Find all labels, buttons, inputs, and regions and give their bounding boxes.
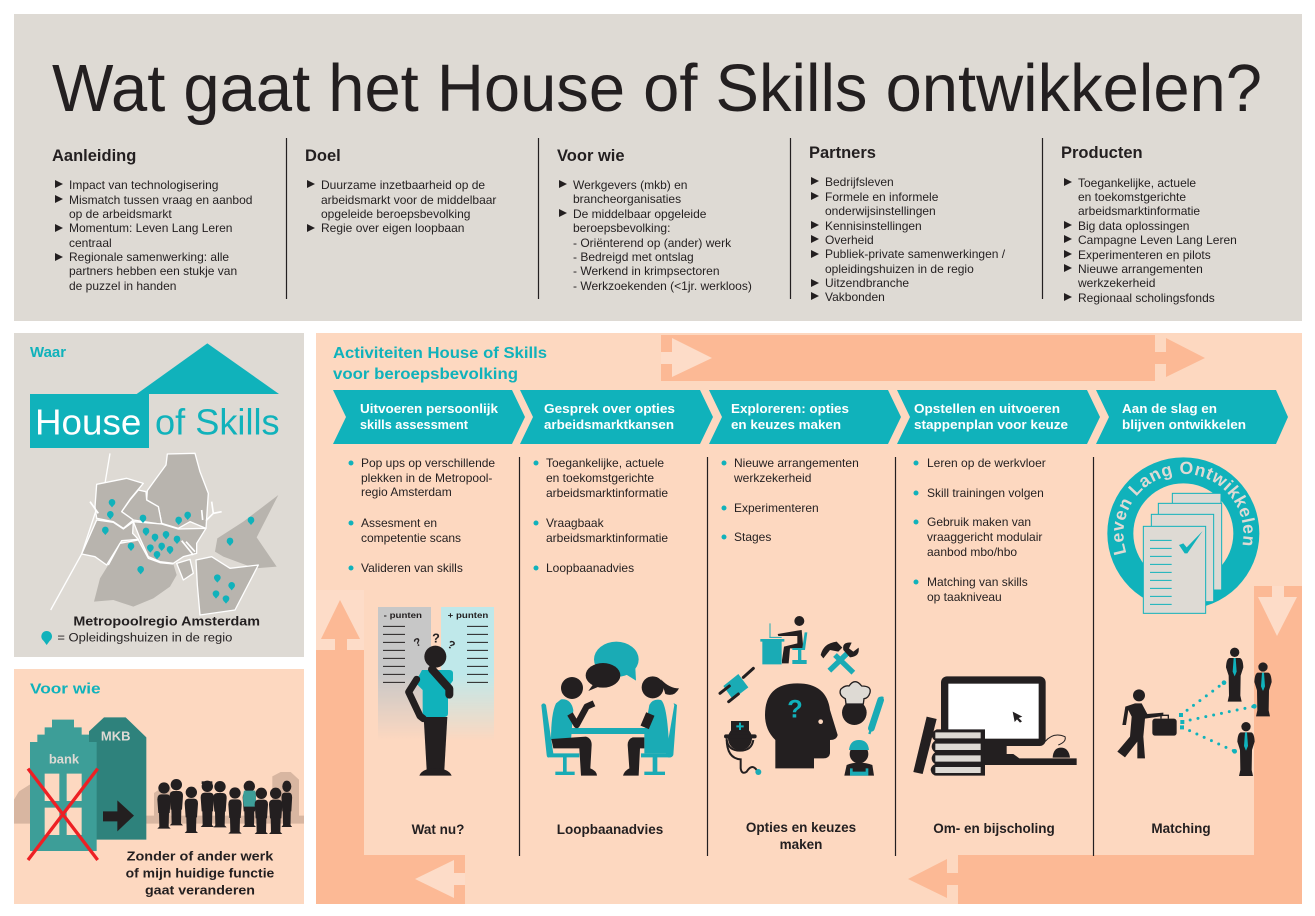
step 4: Opstellen en uitvoeren	[914, 401, 1060, 416]
logo: House of Skills: of Skills	[155, 402, 280, 443]
column: Voor wie: - Bedreigd met ontslag	[573, 250, 694, 264]
caption: of mijn huidige functie	[126, 865, 274, 880]
icon: computer and books	[913, 676, 1077, 776]
heading: Waar: Waar	[30, 344, 66, 361]
icon: crowd of people	[157, 779, 292, 834]
list: column 1: regio Amsterdam	[361, 485, 452, 499]
column: Aanleiding	[52, 147, 252, 293]
list: column 4: Gebruik maken van	[927, 515, 1031, 529]
column: Producten: Regionaal scholingsfonds	[1078, 291, 1215, 305]
column: Aanleiding: Mismatch tussen vraag en aanbod	[69, 193, 252, 207]
legend: = Opleidingshuizen in de regio	[57, 631, 232, 645]
icon: job seeker matched to jobs	[1117, 648, 1272, 776]
column: Partners: Kennisinstellingen	[825, 219, 922, 233]
column: Doel: opgeleide beroepsbevolking	[321, 207, 470, 221]
heading: Voor wie: Voor wie	[30, 680, 101, 697]
step 1: Uitvoeren persoonlijk	[360, 401, 499, 416]
step 5: Aan de slag en	[1122, 401, 1217, 416]
list: column 4: Matching van skills	[927, 575, 1028, 589]
logo: House of Skills	[30, 343, 280, 448]
column: Producten: Campagne Leven Lang Leren	[1078, 233, 1237, 247]
column: Partners: Publiek-private samenwerkingen /	[825, 247, 1006, 261]
list: column 4: Leren op de werkvloer	[927, 456, 1046, 470]
column: Partners	[809, 144, 1006, 304]
column: Producten: Experimenteren en pilots	[1078, 248, 1211, 262]
icon: head with career options	[720, 616, 883, 776]
caption: Zonder of ander werk	[127, 849, 274, 864]
step 1: skills assessment	[360, 417, 469, 432]
caption: Matching: Matching	[1151, 821, 1211, 836]
column: Aanleiding: Aanleiding	[52, 147, 136, 165]
list: column 4: vraaggericht modulair	[927, 530, 1042, 544]
panel: Waar	[14, 333, 304, 657]
icon: Leven Lang Ontwikkelen badge	[1107, 457, 1260, 614]
heading: Activiteiten: Activiteiten House of Skills	[333, 345, 547, 362]
column: Producten	[1061, 144, 1237, 305]
column: Partners: Vakbonden	[825, 290, 885, 304]
column: Producten: en toekomstgerichte	[1078, 190, 1186, 204]
column: Aanleiding: Regionale samenwerking: alle	[69, 250, 229, 264]
list: column 1: competentie scans	[361, 531, 461, 545]
list: column 2: en toekomstgerichte	[546, 471, 654, 485]
map title: Metropoolregio Amsterdam	[73, 613, 260, 628]
column: Voor wie: beroepsbevolking:	[573, 221, 670, 235]
column: Voor wie	[557, 147, 752, 293]
column: Voor wie: De middelbaar opgeleide	[573, 207, 707, 221]
column: Producten: Producten	[1061, 144, 1143, 162]
list: column 4: op taakniveau	[927, 590, 1002, 604]
list: column 1: Pop ups op verschillende	[361, 456, 495, 470]
column: Voor wie: - Oriënterend op (ander) werk	[573, 236, 732, 250]
list: column 2	[534, 456, 668, 575]
column: Doel: Doel	[305, 147, 341, 165]
column: Voor wie: Voor wie	[557, 147, 625, 165]
caption: gaat veranderen	[145, 883, 255, 898]
list: column 2: Vraagbaak	[546, 516, 605, 530]
list: column 3: Experimenteren	[734, 501, 819, 515]
column: Producten: werkzekerheid	[1077, 276, 1155, 290]
list: column 3: Stages	[734, 530, 771, 544]
panel: Voor wie	[14, 669, 304, 904]
step 4: stappenplan voor keuze	[914, 417, 1068, 432]
column: Aanleiding: centraal	[69, 236, 112, 250]
building: bank	[30, 720, 97, 851]
list: column 3: werkzekerheid	[733, 471, 811, 485]
icon: Leven Lang Ontwikkelen badge: Leven Lang Ontwikkelen	[1114, 462, 1255, 556]
logo: House of Skills: House	[35, 402, 141, 443]
title: Wat gaat het House of Skills ontwikkelen?	[52, 51, 1262, 126]
step 1	[333, 390, 525, 444]
caption: Opties en keuzes maken	[746, 820, 856, 852]
column: Doel: Regie over eigen loopbaan	[321, 221, 464, 235]
column: Partners: Uitzendbranche	[825, 276, 909, 290]
heading: Activiteiten: voor beroepsbevolking	[333, 366, 518, 383]
column: Voor wie: - Werkend in krimpsectoren	[573, 264, 720, 278]
column: Partners: Overheid	[825, 233, 874, 247]
column: Aanleiding: Impact van technologisering	[69, 178, 218, 192]
building: bank: bank	[49, 752, 80, 767]
column: Voor wie: - Werkzoekenden (<1jr. werkloos)	[573, 279, 752, 293]
icon: red cross	[28, 769, 98, 860]
list: column 2: Toegankelijke, actuele	[546, 456, 664, 470]
skyline	[14, 772, 304, 824]
icon: thinking person with lists	[378, 607, 494, 776]
step 5: blijven ontwikkelen	[1122, 417, 1246, 432]
list: column 3	[722, 456, 859, 544]
column: Partners: Formele en informele	[825, 190, 939, 204]
map: Metropoolregio Amsterdam	[51, 453, 278, 615]
column: Voor wie: Werkgevers (mkb) en	[573, 178, 687, 192]
column: Producten: arbeidsmarktinformatie	[1078, 204, 1200, 218]
arrow: circular flow	[316, 335, 1302, 904]
column: Partners: Bedrijfsleven	[825, 175, 894, 189]
column: Aanleiding: de puzzel in handen	[69, 279, 176, 293]
column: Partners: Partners	[809, 144, 876, 162]
caption: Wat nu?: Wat nu?	[412, 822, 464, 837]
list: column 2: arbeidsmarktinformatie	[546, 486, 668, 500]
list: column 3: Nieuwe arrangementen	[734, 456, 859, 470]
building: MKB: MKB	[101, 729, 130, 744]
column: Aanleiding: Momentum: Leven Lang Leren	[69, 221, 232, 235]
column: Doel: Duurzame inzetbaarheid op de	[321, 178, 485, 192]
icon: thinking person with lists: ?	[412, 636, 424, 650]
column: Aanleiding: partners hebben een stukje van	[69, 264, 237, 278]
list: column 4	[914, 456, 1046, 604]
icon: two people in conversation	[541, 642, 679, 776]
caption: Loopbaanadvies: Loopbaanadvies	[557, 822, 663, 837]
icon: thinking person with lists: - punten	[384, 611, 422, 620]
list: column 4: Skill trainingen volgen	[927, 486, 1044, 500]
list: column 2: Loopbaanadvies	[546, 561, 634, 575]
column: Producten: Nieuwe arrangementen	[1078, 262, 1203, 276]
column: Producten: Toegankelijke, actuele	[1078, 176, 1196, 190]
icon: head with career options: ?	[787, 695, 803, 723]
step 2: arbeidsmarktkansen	[544, 417, 674, 432]
caption: Opties en keuzes maken: maken	[780, 837, 822, 852]
panel: header	[14, 14, 1302, 321]
list: column 1	[348, 456, 495, 575]
step 2: Gesprek over opties	[544, 401, 675, 416]
list: column 1: Valideren van skills	[361, 561, 463, 575]
caption	[126, 849, 274, 898]
step 2	[520, 390, 713, 444]
heading: Activiteiten	[333, 345, 547, 383]
list: column 1: Assesment en	[361, 516, 437, 530]
column: Voor wie: brancheorganisaties	[573, 192, 681, 206]
column: Doel	[305, 147, 496, 235]
step 4	[897, 390, 1100, 444]
step 3: en keuzes maken	[731, 417, 841, 432]
list: column 4: aanbod mbo/hbo	[927, 545, 1017, 559]
icon: thinking person with lists: ?	[445, 639, 457, 653]
column: Doel: arbeidsmarkt voor de middelbaar	[321, 193, 496, 207]
list: column 1: plekken in de Metropool-	[361, 471, 492, 485]
step 3	[709, 390, 901, 444]
column: Aanleiding: op de arbeidsmarkt	[69, 207, 172, 221]
caption: Om- en bijscholing: Om- en bijscholing	[933, 821, 1055, 836]
step 5	[1096, 390, 1288, 444]
icon: thinking person with lists: ?	[432, 632, 440, 646]
panel: Activiteiten	[316, 333, 1302, 904]
icon: thinking person with lists: + punten	[448, 611, 488, 620]
column: Partners: onderwijsinstellingen	[825, 204, 936, 218]
column: Partners: opleidingshuizen in de regio	[825, 262, 974, 276]
step 3: Exploreren: opties	[731, 401, 849, 416]
column: Producten: Big data oplossingen	[1078, 219, 1189, 233]
caption: Opties en keuzes maken: Opties en keuzes	[746, 820, 856, 835]
building: MKB	[89, 717, 146, 840]
icon: arrow	[103, 800, 134, 831]
list: column 2: arbeidsmarktinformatie	[546, 531, 668, 545]
